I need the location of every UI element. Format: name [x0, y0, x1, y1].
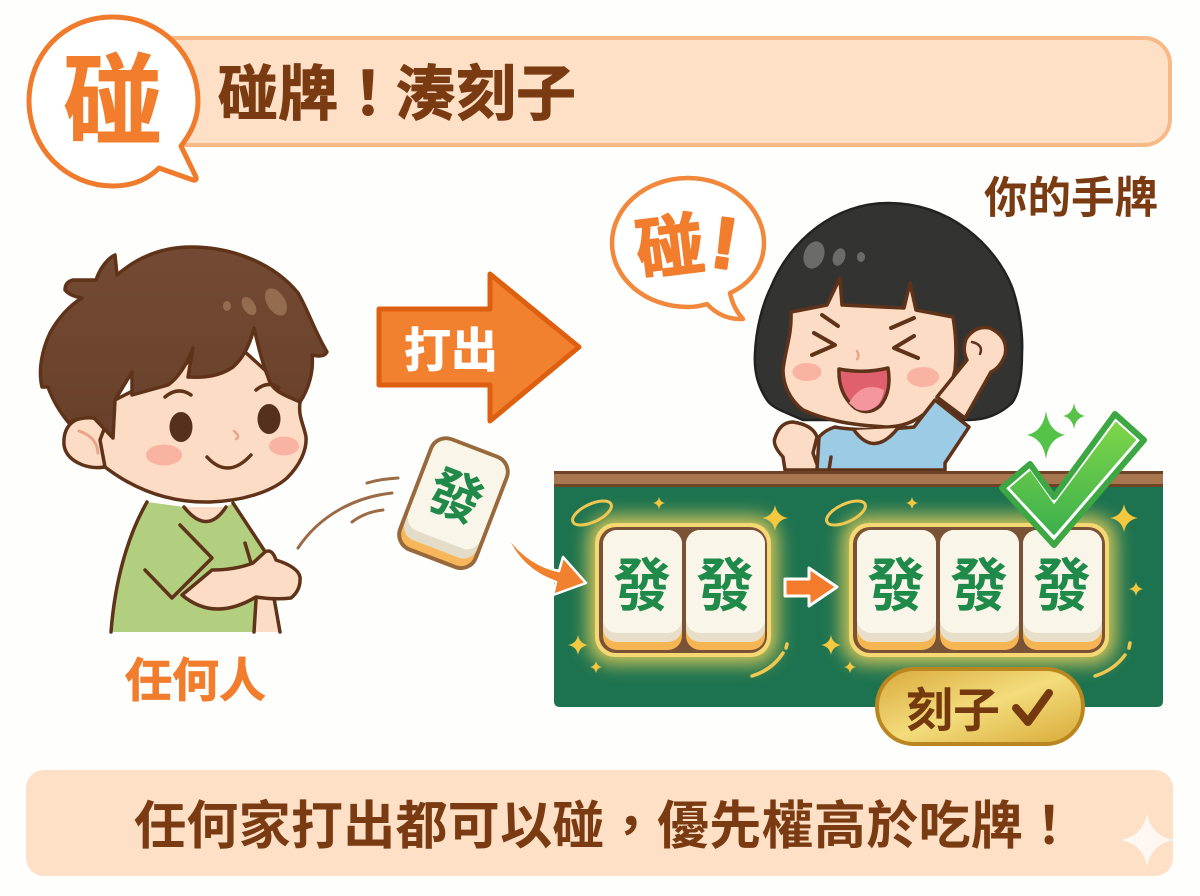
- hair highlights: [800, 238, 828, 272]
- table: [554, 471, 1163, 707]
- sleeve: [145, 525, 212, 598]
- bubble text: 碰: [632, 206, 709, 290]
- eyes: [170, 412, 192, 442]
- label: anyone: 任何人: [125, 654, 266, 707]
- shirt: [817, 400, 969, 470]
- arm and hand: [182, 551, 300, 609]
- check fill: [1011, 423, 1135, 534]
- corner sparkle: [1120, 813, 1174, 867]
- tile 5: [1023, 530, 1102, 650]
- arrow: play out: [379, 274, 579, 421]
- curved arrow to hand: [505, 533, 586, 595]
- tile body: [395, 434, 512, 573]
- face: [783, 278, 956, 427]
- flying tile: [395, 434, 512, 573]
- tile 4: [940, 530, 1019, 650]
- speech bubble: pong: [612, 178, 764, 319]
- hair: [755, 203, 1022, 420]
- mouth: [839, 368, 889, 412]
- lower arm: [254, 598, 280, 632]
- arrow label: 打出: [404, 324, 498, 377]
- green check mark: [1002, 403, 1144, 545]
- tile triplet: 發: [950, 554, 1008, 619]
- hair: [40, 247, 327, 438]
- nose: [857, 351, 858, 359]
- sleeve crease: [829, 457, 831, 470]
- hair highlights: [260, 285, 292, 319]
- badge pill: [877, 669, 1083, 744]
- face: [100, 340, 306, 502]
- title right: 湊刻子: [396, 61, 576, 128]
- arrow between tile groups: [785, 568, 837, 606]
- bubble: [612, 178, 764, 319]
- collar: [184, 507, 226, 522]
- triplet glow: [842, 516, 1116, 664]
- tile 3: [857, 530, 936, 650]
- raised arm: [937, 327, 1006, 418]
- note text: 任何家打出都可以碰，優先權高於吃牌！: [134, 798, 1075, 856]
- arrow body: [379, 274, 579, 421]
- gold decorations: [568, 497, 1143, 673]
- tile characters: 發: [613, 554, 671, 619]
- badge: triplet: [877, 669, 1083, 744]
- ear: [64, 418, 115, 468]
- cheeks: [146, 444, 182, 466]
- collar: [854, 428, 898, 444]
- nose: [234, 431, 238, 439]
- tile 1: [603, 530, 682, 650]
- bottom note: [26, 770, 1174, 876]
- speech bubble badge: [29, 17, 198, 186]
- motion lines: [298, 478, 398, 548]
- header: [29, 17, 1170, 186]
- halos and swishes: [569, 496, 1130, 676]
- shirt: [111, 502, 266, 632]
- tile character: 發: [419, 460, 491, 535]
- badge character: 碰: [64, 46, 162, 157]
- check outline: [1002, 414, 1144, 545]
- tile 2: [686, 530, 765, 650]
- left hand: [774, 422, 819, 470]
- wood rail: [554, 471, 1163, 487]
- badge text: 刻子: [906, 684, 1000, 737]
- title left: 碰牌！: [218, 61, 398, 128]
- title banner: [110, 38, 1170, 145]
- tile triplet: 發: [1033, 554, 1091, 619]
- tile triplet: [849, 523, 1109, 657]
- cheeks: [792, 363, 822, 381]
- badge check: [1016, 693, 1049, 722]
- character: boy: [40, 247, 327, 632]
- note bar: [26, 770, 1173, 876]
- tile characters: 發: [867, 554, 925, 619]
- tile pair: 發: [696, 554, 754, 619]
- character: girl: [755, 203, 1022, 470]
- label: your hand: 你的手牌: [984, 175, 1158, 223]
- eyes: [812, 315, 918, 358]
- pair glow: [588, 516, 778, 664]
- exclamation: !: [707, 203, 742, 285]
- felt: [554, 487, 1163, 707]
- mouth: [207, 455, 251, 468]
- eyebrows: [165, 384, 279, 397]
- sparkles: [1027, 411, 1065, 459]
- tile pair: [595, 523, 771, 657]
